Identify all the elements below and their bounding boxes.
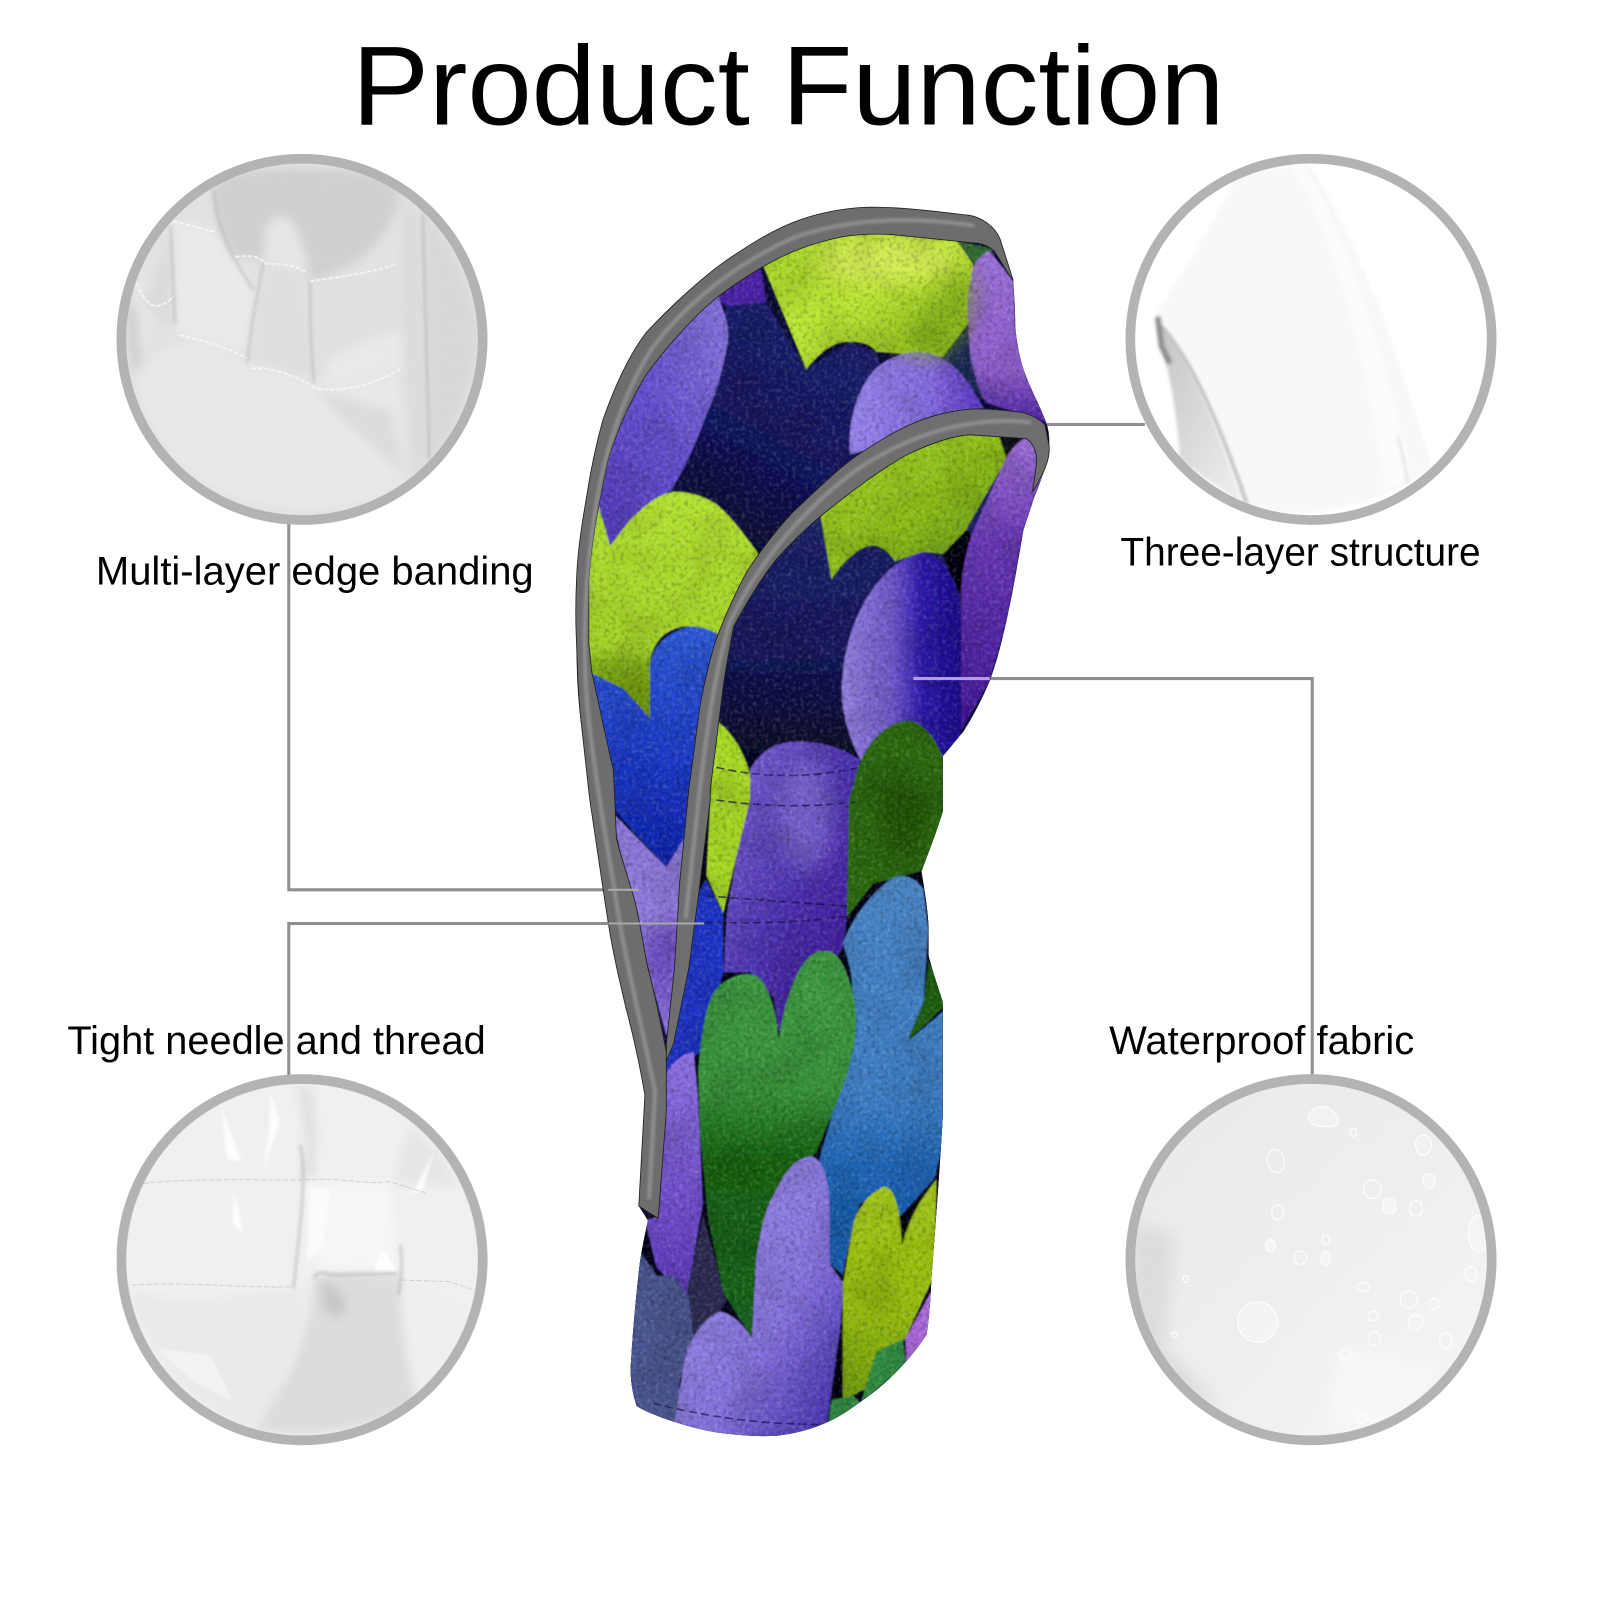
circle ring xyxy=(1130,159,1492,520)
fabric grain xyxy=(1125,1075,1498,1448)
flap highlight xyxy=(686,421,1031,918)
green heart xyxy=(698,951,856,1339)
product: hood cover xyxy=(561,194,1071,1449)
edge band: outer xyxy=(576,207,1013,1218)
detail circle: waterproof fabric xyxy=(1125,1075,1498,1448)
leather grain xyxy=(117,153,490,527)
green heart shading xyxy=(879,776,928,857)
label: multi-layer edge banding: Multi-layer edge banding xyxy=(96,550,534,594)
fabric texture xyxy=(571,204,1061,1444)
folds xyxy=(127,1085,470,1434)
detail circle: tight needle and thread xyxy=(117,1075,490,1448)
black corner xyxy=(998,437,1024,458)
periwinkle blob xyxy=(850,352,984,454)
shading xyxy=(1132,1222,1442,1428)
folds xyxy=(127,168,478,508)
lilac shading xyxy=(642,916,677,1032)
green patch xyxy=(860,1339,906,1404)
lilac column xyxy=(645,1052,703,1297)
edge band: front flap xyxy=(666,409,1049,1061)
crease lines xyxy=(171,190,429,460)
title: Product Function xyxy=(352,22,1224,148)
blue heart xyxy=(582,627,727,867)
navy heart, rear panel xyxy=(670,302,898,556)
circle ring xyxy=(121,159,483,520)
black gap, lime heart xyxy=(900,1192,923,1247)
band highlight xyxy=(585,220,974,1199)
front flap fabric xyxy=(571,204,1061,1449)
dark green corner xyxy=(957,241,995,263)
leader line: tight needle and thread xyxy=(289,923,608,1077)
dark gap xyxy=(687,1214,727,1352)
green wedge xyxy=(907,960,943,1042)
crease lines xyxy=(293,1145,402,1295)
seam lines xyxy=(1158,317,1408,503)
green patch, bottom xyxy=(829,1396,862,1422)
circle ring xyxy=(1130,1079,1492,1440)
leader line: multi-layer edge banding xyxy=(289,522,608,890)
label: waterproof fabric: Waterproof fabric xyxy=(1109,1019,1414,1063)
blue heart, large xyxy=(819,876,949,1276)
purple oval heart xyxy=(842,552,961,763)
mauve patch xyxy=(905,1281,937,1364)
purple shape, flap right xyxy=(960,438,1044,730)
fabric shape xyxy=(1157,163,1432,513)
lime heart, top xyxy=(763,224,973,369)
water droplets xyxy=(1172,1107,1490,1424)
lime heart, flap xyxy=(819,423,1007,580)
black gap xyxy=(942,529,972,600)
stitching xyxy=(132,1179,473,1290)
leader line: waterproof fabric xyxy=(990,679,1312,1077)
lime heart, bottom xyxy=(843,1179,937,1400)
mauve shape, upper right xyxy=(967,251,1051,424)
navy heart, flap xyxy=(714,516,898,776)
detail circle: three-layer structure xyxy=(1125,153,1498,527)
label: three-layer structure: Three-layer structure xyxy=(1120,530,1481,574)
lilac heart, lower left xyxy=(612,806,704,1036)
black gap, bottom xyxy=(824,1276,859,1427)
detail circle: multi-layer edge banding xyxy=(117,153,490,527)
purple heart, centre xyxy=(723,741,860,1036)
label: tight needle and thread: Tight needle and thread xyxy=(67,1019,486,1063)
faint leader overlays xyxy=(608,679,990,923)
seam stitches xyxy=(653,767,860,1424)
slate-blue shape xyxy=(630,1252,694,1422)
lime light patch xyxy=(816,238,959,283)
lime heart, small xyxy=(706,719,751,913)
blue strip xyxy=(663,880,723,1087)
violet wedge xyxy=(716,265,766,306)
olive shade on top lime xyxy=(898,270,973,357)
circle ring xyxy=(121,1079,483,1440)
gloss highlights xyxy=(157,1092,433,1402)
dark patch xyxy=(943,329,987,403)
lime heart, mid left xyxy=(582,492,760,718)
stitching xyxy=(137,222,402,390)
purple heart, upper left xyxy=(597,291,728,546)
leader line: three-layer structure xyxy=(1047,423,1145,426)
centre heart shading xyxy=(778,760,835,872)
dark green heart xyxy=(843,720,949,917)
rear panel fabric xyxy=(561,194,1071,1449)
lilac heart, bottom xyxy=(673,1156,844,1441)
